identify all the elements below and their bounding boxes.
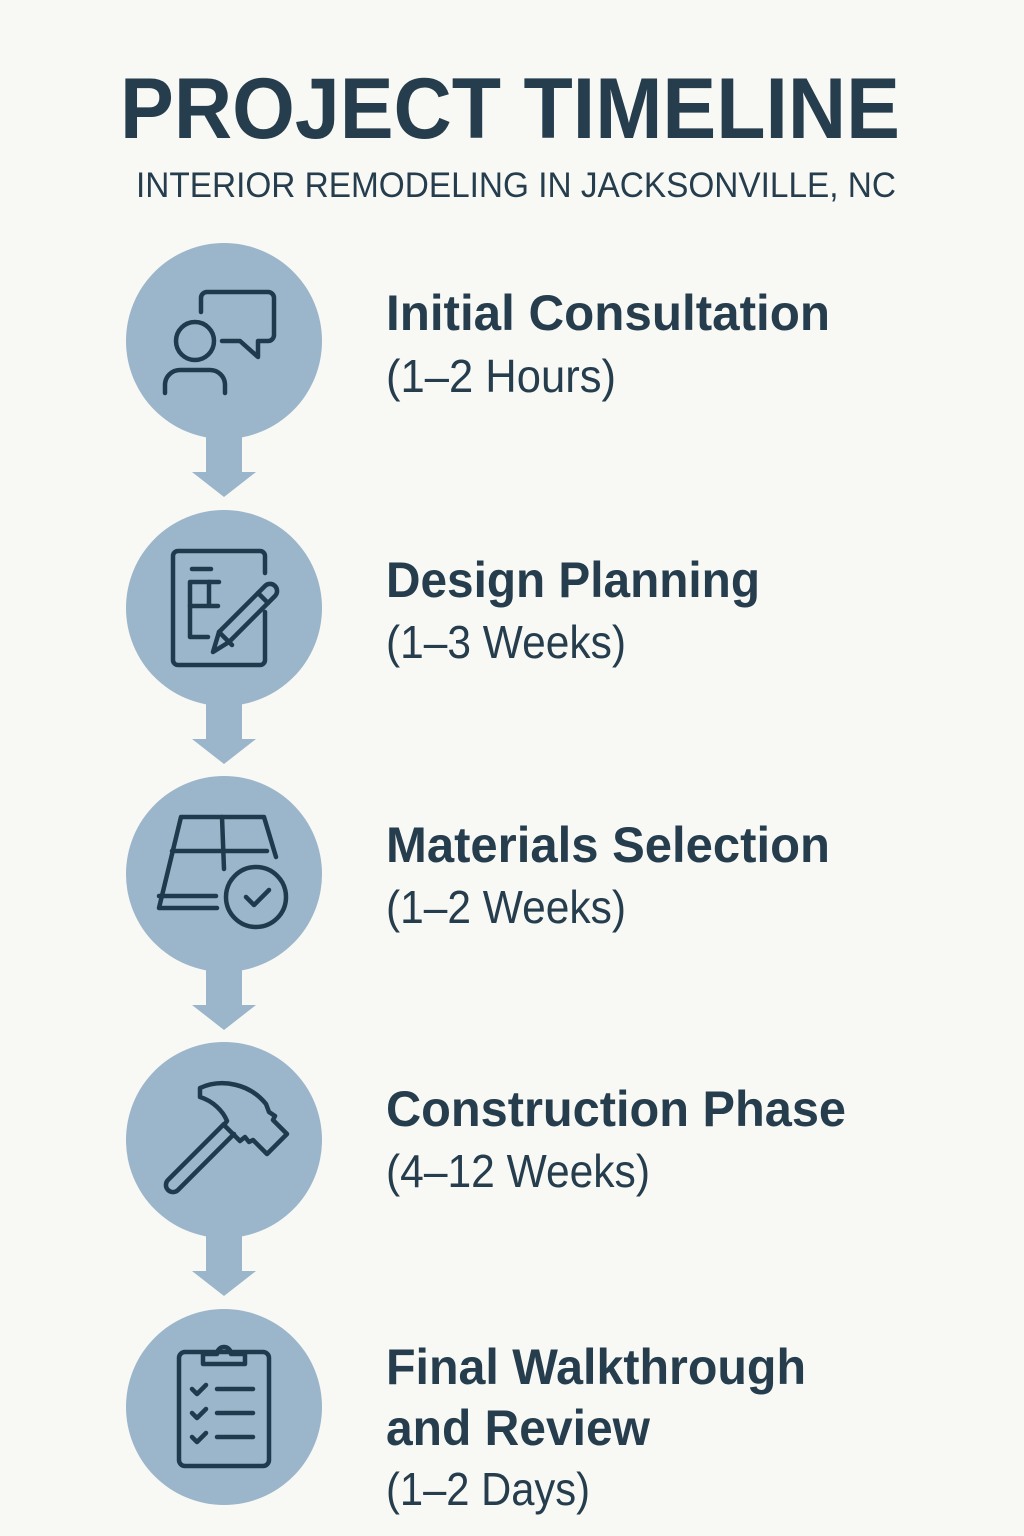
icon: design plan with pencil [126,510,322,706]
text: step 4: (4–12 Weeks) [386,1145,650,1197]
text: step 1: (1–2 Hours) [386,350,616,402]
icon: consultation [126,243,322,439]
text: step 3: Materials Selection [386,817,830,873]
arrow: step 4 to 5 [192,1229,256,1296]
text: step 1 [386,285,830,402]
text: step 5: and Review [386,1400,650,1456]
text: step 5 [386,1339,806,1515]
title: PROJECT TIMELINE [120,61,900,157]
text: step 5: Final Walkthrough [386,1339,806,1395]
arrow: step 1 to 2 [192,430,256,497]
arrow: step 3 to 4 [192,963,256,1030]
text: step 2 [386,552,760,668]
text: step 1: Initial Consultation [386,285,830,341]
text: step 3 [386,817,830,933]
step 5: final walkthrough [126,1309,806,1515]
icon: hammer [126,1042,322,1238]
subtitle: INTERIOR REMODELING IN JACKSONVILLE, NC [136,166,896,205]
step 3: materials selection [126,776,830,972]
icon: tiles with check [126,776,322,972]
text: step 2: Design Planning [386,552,760,608]
text: step 5: (1–2 Days) [386,1463,590,1515]
step 2: design planning [126,510,760,706]
arrow: step 2 to 3 [192,697,256,764]
text: step 4 [386,1081,846,1197]
text: step 3: (1–2 Weeks) [386,881,626,933]
text: step 2: (1–3 Weeks) [386,616,626,668]
step 1: initial consultation [126,243,830,439]
step 4: construction phase [126,1042,846,1238]
text: step 4: Construction Phase [386,1081,846,1137]
icon: clipboard checklist [126,1309,322,1505]
